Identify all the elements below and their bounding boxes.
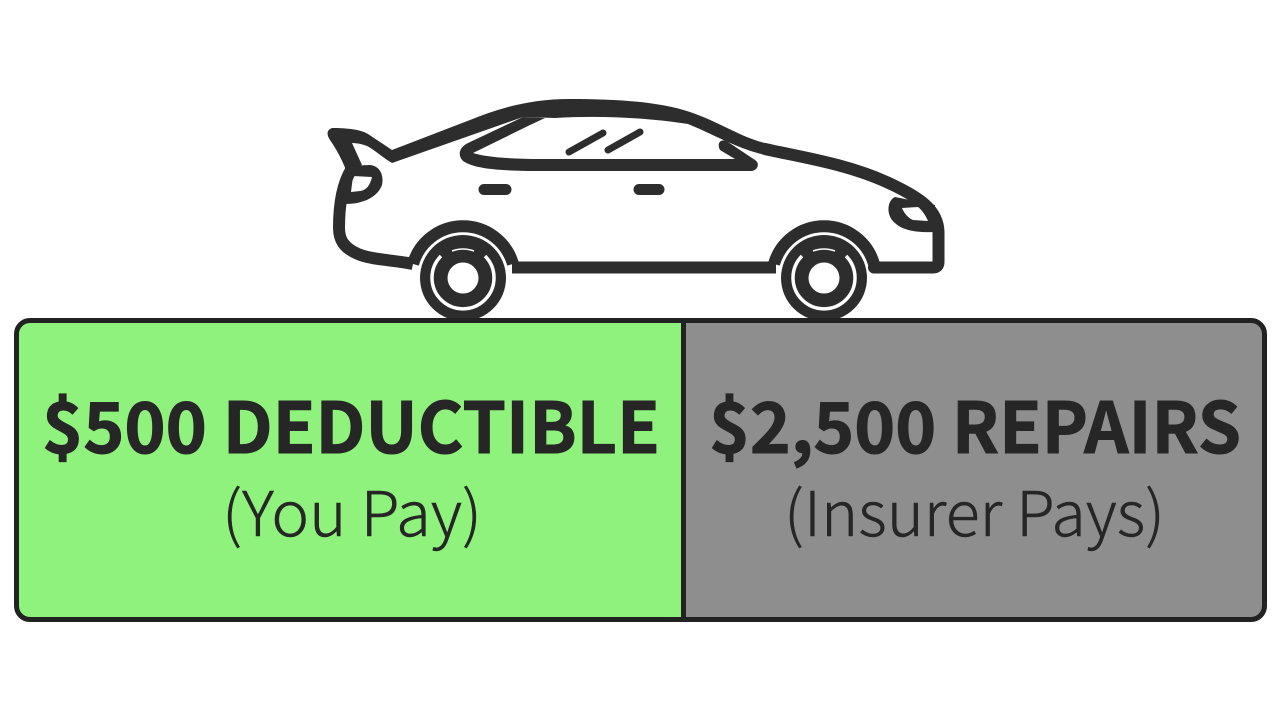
spoiler — [328, 128, 392, 170]
rear door handle — [484, 184, 506, 195]
headlight — [888, 197, 935, 232]
front wheel arch — [774, 226, 874, 264]
panel: cost bar — [16, 320, 1264, 620]
heading: repairs amount: $2,500 REPAIRS — [709, 373, 1241, 474]
rear wheel arch — [413, 226, 513, 264]
text: insurer pays: (Insurer Pays) — [784, 464, 1165, 554]
glass glint two — [608, 132, 640, 150]
sill line — [512, 262, 776, 274]
glass glint one — [569, 133, 603, 152]
bar outline — [16, 320, 1264, 620]
car rear body — [339, 170, 413, 264]
icon: rear wheel — [420, 235, 506, 321]
panel: deductible — [16, 320, 683, 620]
panel: repairs — [683, 320, 1264, 620]
tail light — [345, 165, 382, 204]
bar divider — [681, 320, 686, 620]
front door handle — [639, 184, 659, 195]
heading: deductible amount: $500 DEDUCTIBLE — [42, 373, 660, 474]
window frame — [460, 117, 758, 171]
hood and front bumper — [765, 149, 938, 268]
icon: car outline — [328, 99, 938, 268]
text: you pay: (You Pay) — [222, 464, 482, 554]
icon: front wheel — [781, 235, 867, 321]
car roofline — [392, 99, 770, 163]
